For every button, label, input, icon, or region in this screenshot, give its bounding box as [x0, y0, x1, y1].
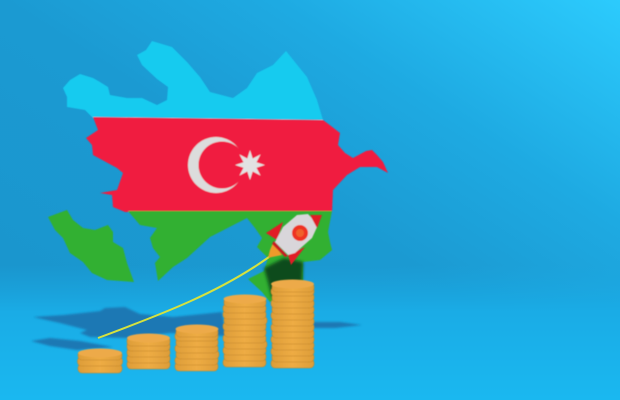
map: blue band	[63, 41, 323, 120]
coin stack 2	[127, 334, 170, 369]
icon: rocket	[266, 214, 322, 265]
coin stack 1	[78, 348, 122, 373]
coin stack 3	[175, 324, 219, 371]
rocket left fin	[266, 222, 283, 240]
rocket lower fin	[288, 247, 305, 265]
map: red band	[86, 117, 388, 212]
map of Azerbaijan in flag colours	[48, 41, 388, 302]
coin stack 4	[223, 294, 267, 367]
coin stack 5	[271, 280, 314, 368]
coin stacks chart	[78, 280, 314, 373]
floor shadows	[31, 307, 362, 350]
rocket base ring	[272, 241, 288, 257]
rocket nozzle	[268, 243, 282, 258]
rocket emblem	[292, 225, 308, 241]
map: green exclave	[48, 210, 134, 282]
rocket body	[275, 214, 318, 255]
flag star	[235, 150, 265, 180]
flag crescent	[188, 137, 246, 193]
map: main green band	[128, 211, 332, 302]
rocket trail	[98, 257, 269, 338]
rocket shadow on map	[264, 258, 303, 298]
rocket nose	[310, 215, 322, 228]
